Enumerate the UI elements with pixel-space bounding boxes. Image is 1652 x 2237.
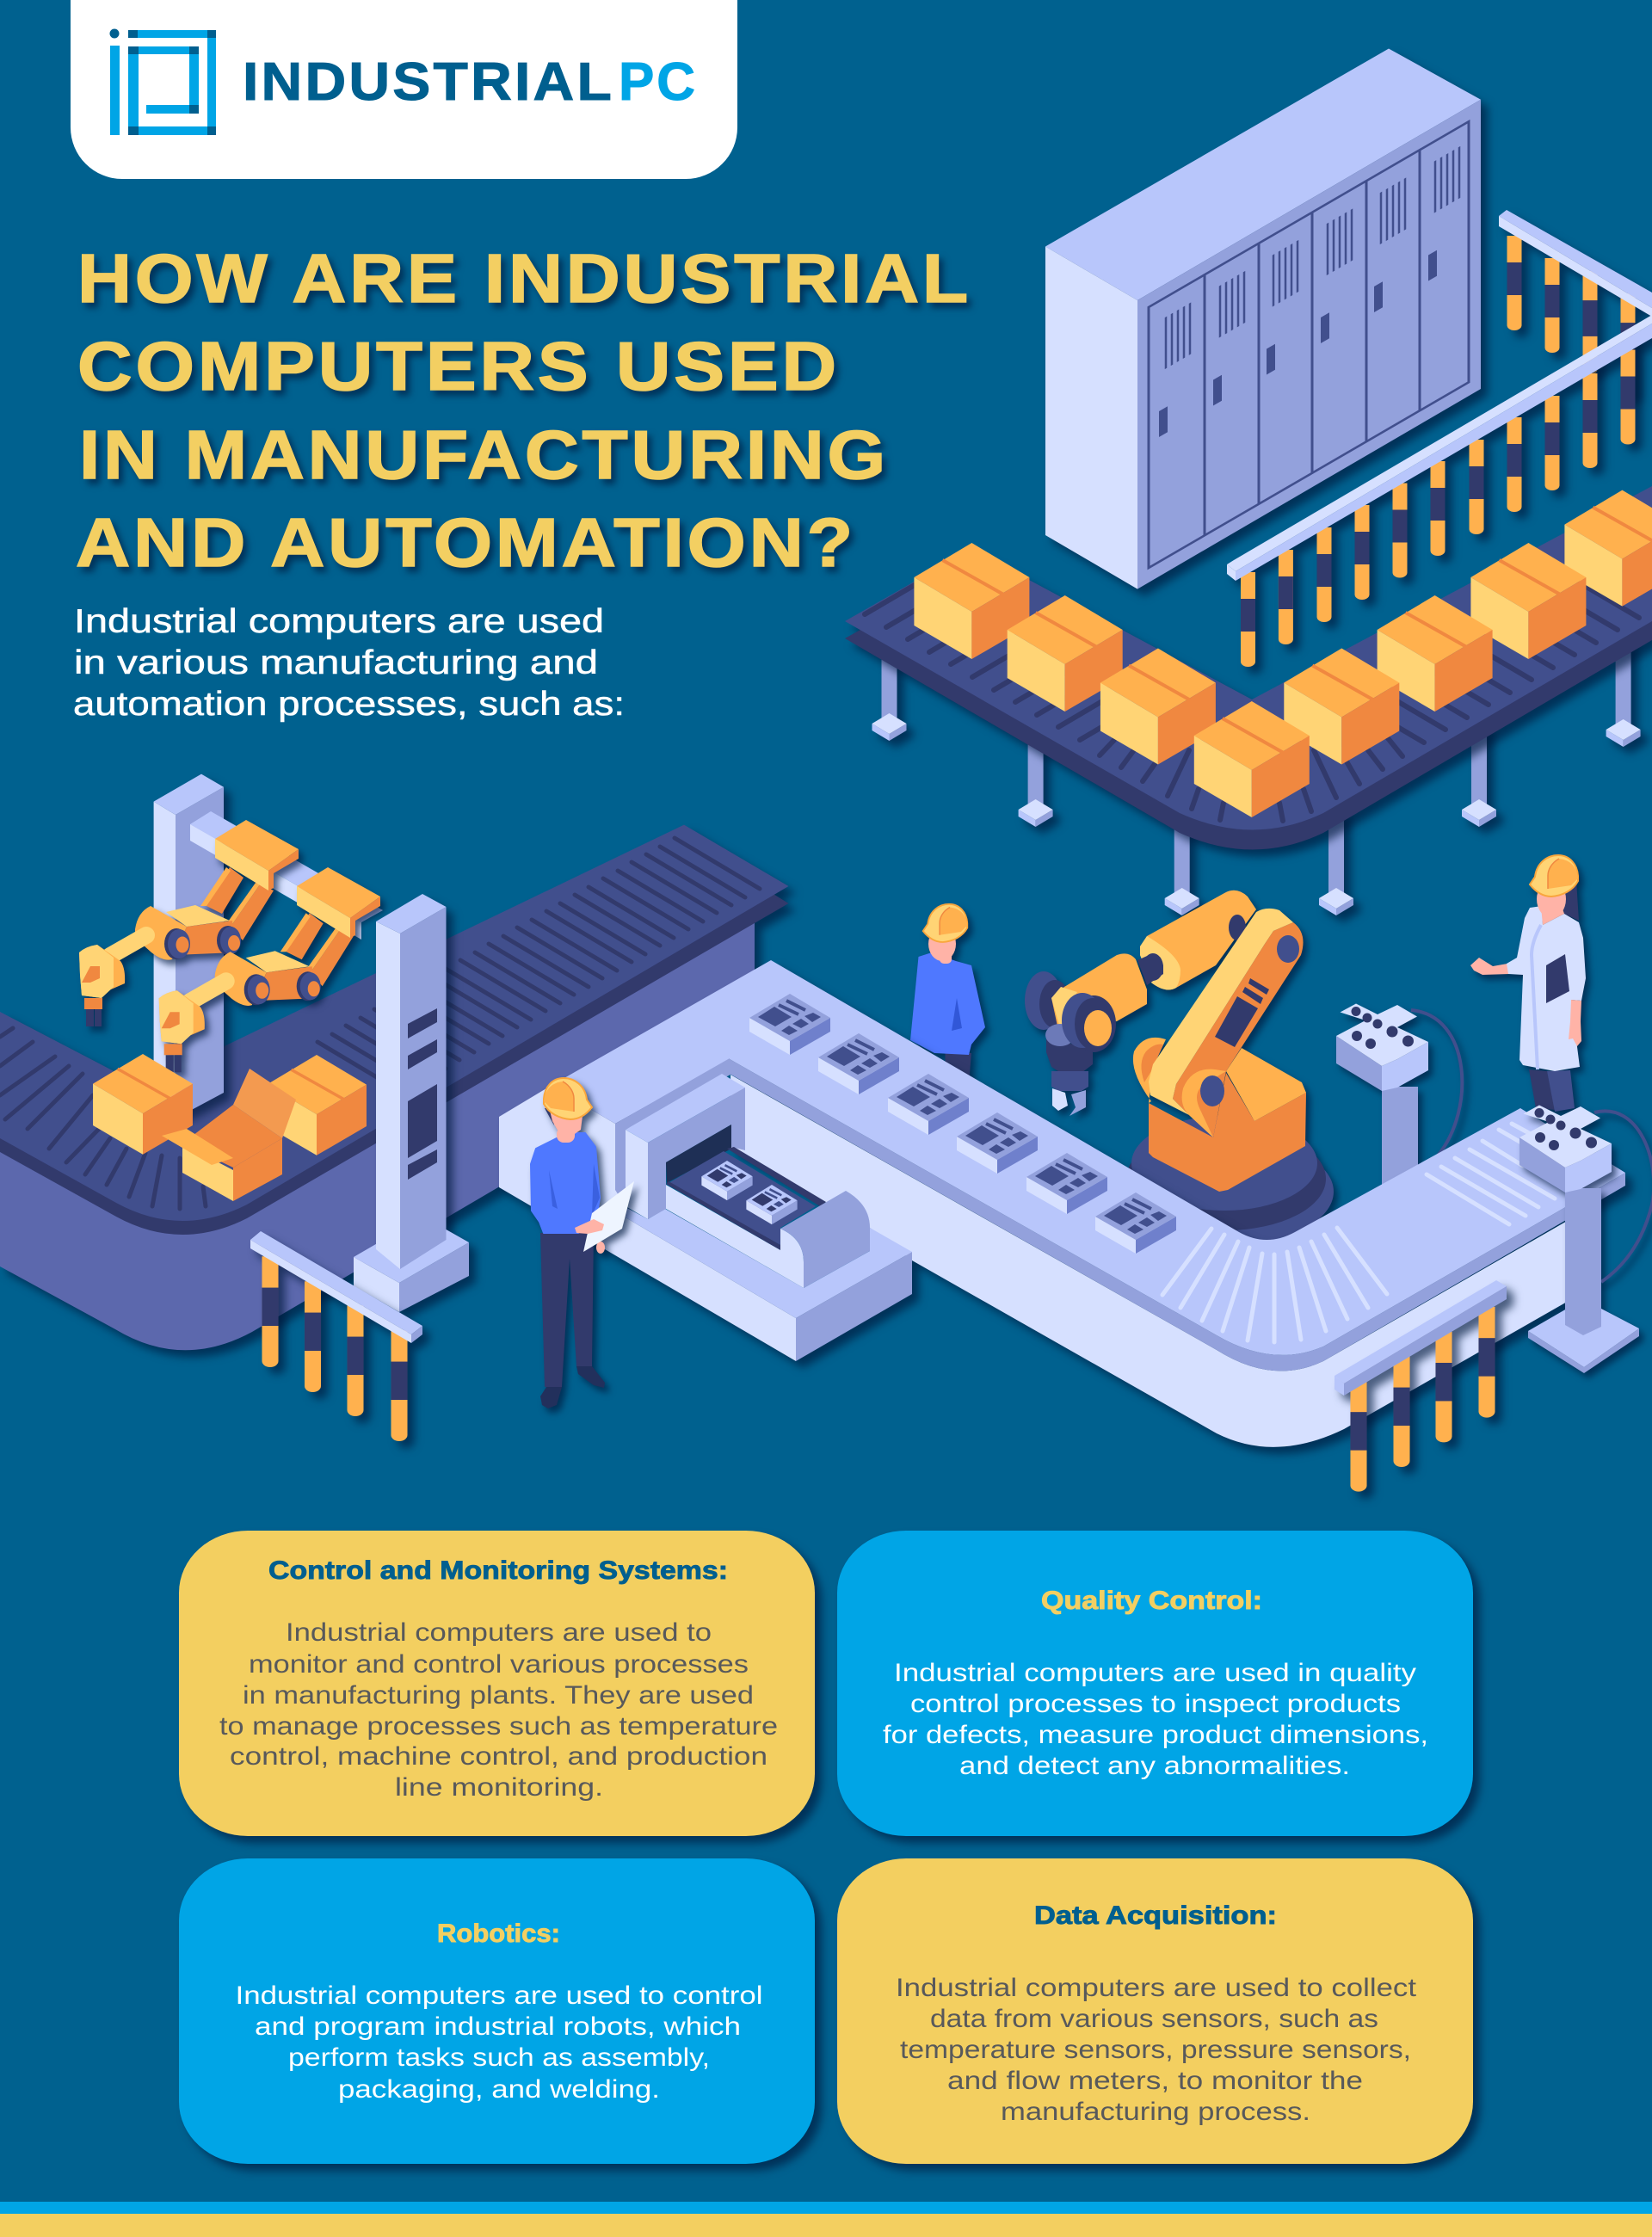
panel: data acquisition bbox=[837, 1858, 1473, 2164]
body: robotics: and program industrial robots, which bbox=[255, 2012, 741, 2041]
body: control and monitoring bbox=[219, 1618, 778, 1802]
title: COMPUTERS USED bbox=[77, 328, 840, 404]
illustration: upper conveyor legs bbox=[872, 628, 1641, 915]
body: control and monitoring: line monitoring. bbox=[395, 1773, 603, 1802]
illustration: cardboard boxes on conveyor bbox=[914, 490, 1652, 817]
machine base top bbox=[626, 1207, 912, 1318]
body: robotics: packaging, and welding. bbox=[338, 2075, 660, 2104]
title: HOW ARE INDUSTRIAL bbox=[77, 240, 971, 317]
machine side wall bbox=[730, 1075, 1575, 1447]
title: AND AUTOMATION? bbox=[76, 504, 856, 581]
heading: quality control: Quality Control: bbox=[1041, 1587, 1262, 1615]
conveyor fan lines bbox=[1162, 1124, 1555, 1342]
illustration: robot arm one bbox=[79, 820, 299, 1026]
icon: IPC logo mark bbox=[110, 29, 216, 135]
conveyor top surface bbox=[551, 960, 1625, 1355]
body: control and monitoring: control, machine control, and production bbox=[230, 1742, 767, 1771]
illustration: pedestal control box two bbox=[1519, 1105, 1652, 1373]
body: quality control: and detect any abnormalities. bbox=[959, 1752, 1350, 1780]
illustration: worker in blue behind machine bbox=[910, 904, 985, 1084]
illustration: circuit boards on conveyor bbox=[749, 994, 1176, 1254]
body: quality control: Industrial computers are used in quality bbox=[894, 1659, 1416, 1687]
intro text bbox=[73, 603, 625, 723]
illustration: front safety rail with posts bbox=[1227, 315, 1652, 667]
conveyor edge strip bbox=[730, 1059, 1625, 1371]
logo panel bbox=[71, 0, 737, 179]
title: IN MANUFACTURING bbox=[79, 416, 889, 493]
title bbox=[76, 240, 971, 581]
intro text: Industrial computers are used bbox=[74, 603, 604, 640]
illustration: woman in lab coat bbox=[1470, 855, 1586, 1112]
robot gripper bbox=[1045, 993, 1116, 1116]
illustration: gantry beam bbox=[190, 811, 383, 940]
body: robotics: Industrial computers are used to control bbox=[236, 1981, 762, 2010]
body: control and monitoring: in manufacturing plants. They are used bbox=[243, 1681, 754, 1710]
illustration: robot arm two bbox=[159, 867, 380, 1072]
panel: control and monitoring systems bbox=[179, 1531, 815, 1836]
illustration: upper conveyor belt bbox=[845, 486, 1652, 850]
intro text: automation processes, such as: bbox=[73, 686, 625, 723]
illustration: light inspection conveyor bbox=[499, 960, 1625, 1447]
illustration: lower left conveyor bbox=[0, 825, 788, 1350]
heading: control and monitoring: Control and Monitoring Systems: bbox=[268, 1556, 728, 1585]
body: quality control: for defects, measure product dimensions, bbox=[883, 1721, 1428, 1749]
illustration: open box bbox=[162, 1069, 296, 1201]
body: control and monitoring: to manage processes such as temperature bbox=[219, 1712, 778, 1741]
illustration: orange industrial robot bbox=[1025, 890, 1334, 1245]
illustration: boxes on lower conveyor bbox=[93, 1054, 367, 1201]
illustration: rear safety rail bbox=[1499, 210, 1652, 397]
footer stripes bbox=[0, 2202, 1652, 2237]
logo wordmark: PC bbox=[619, 52, 698, 112]
illustration: tunnel scanner bbox=[615, 1058, 870, 1288]
body: data acquisition: data from various sensors, such as bbox=[930, 2005, 1378, 2033]
body: data acquisition: temperature sensors, pressure sensors, bbox=[900, 2036, 1411, 2064]
illustration: pedestal control box one bbox=[1336, 1003, 1462, 1194]
illustration: gantry front column bbox=[354, 894, 469, 1312]
logo wordmark: INDUSTRIAL bbox=[243, 52, 614, 112]
body: control and monitoring: monitor and control various processes bbox=[249, 1650, 749, 1679]
robot upper arm bbox=[1133, 909, 1304, 1137]
body: data acquisition: and flow meters, to monitor the bbox=[947, 2067, 1363, 2095]
illustration: server lockers bbox=[1045, 48, 1481, 589]
illustration: lower left safety rail bbox=[250, 1231, 422, 1441]
illustration: gantry back column bbox=[154, 774, 224, 1118]
intro text: in various manufacturing and bbox=[74, 644, 598, 681]
robot base bbox=[1124, 1116, 1334, 1245]
robot body bbox=[1149, 1048, 1306, 1192]
body: robotics bbox=[236, 1981, 762, 2104]
body: data acquisition: Industrial computers are used to collect bbox=[896, 1974, 1417, 2002]
body: data acquisition bbox=[896, 1974, 1417, 2126]
heading: robotics: Robotics: bbox=[437, 1920, 560, 1948]
machine base right face bbox=[796, 1252, 912, 1361]
panel: quality control bbox=[837, 1531, 1473, 1836]
body: quality control: control processes to inspect products bbox=[910, 1690, 1401, 1718]
panel: robotics bbox=[179, 1858, 815, 2164]
body: control and monitoring: Industrial computers are used to bbox=[286, 1618, 712, 1647]
tunnel hood bbox=[780, 1191, 870, 1288]
body: data acquisition: manufacturing process. bbox=[1001, 2098, 1310, 2126]
robot forearm bbox=[1025, 890, 1256, 1031]
boards in tunnel bbox=[701, 1161, 798, 1224]
machine left face bbox=[499, 1086, 796, 1361]
body: quality control bbox=[883, 1659, 1428, 1780]
illustration: lower right safety rail bbox=[1335, 1280, 1507, 1492]
illustration: worker one with paper bbox=[531, 1078, 634, 1408]
body: robotics: perform tasks such as assembly, bbox=[288, 2043, 710, 2072]
heading: data acquisition: Data Acquisition: bbox=[1034, 1901, 1277, 1930]
